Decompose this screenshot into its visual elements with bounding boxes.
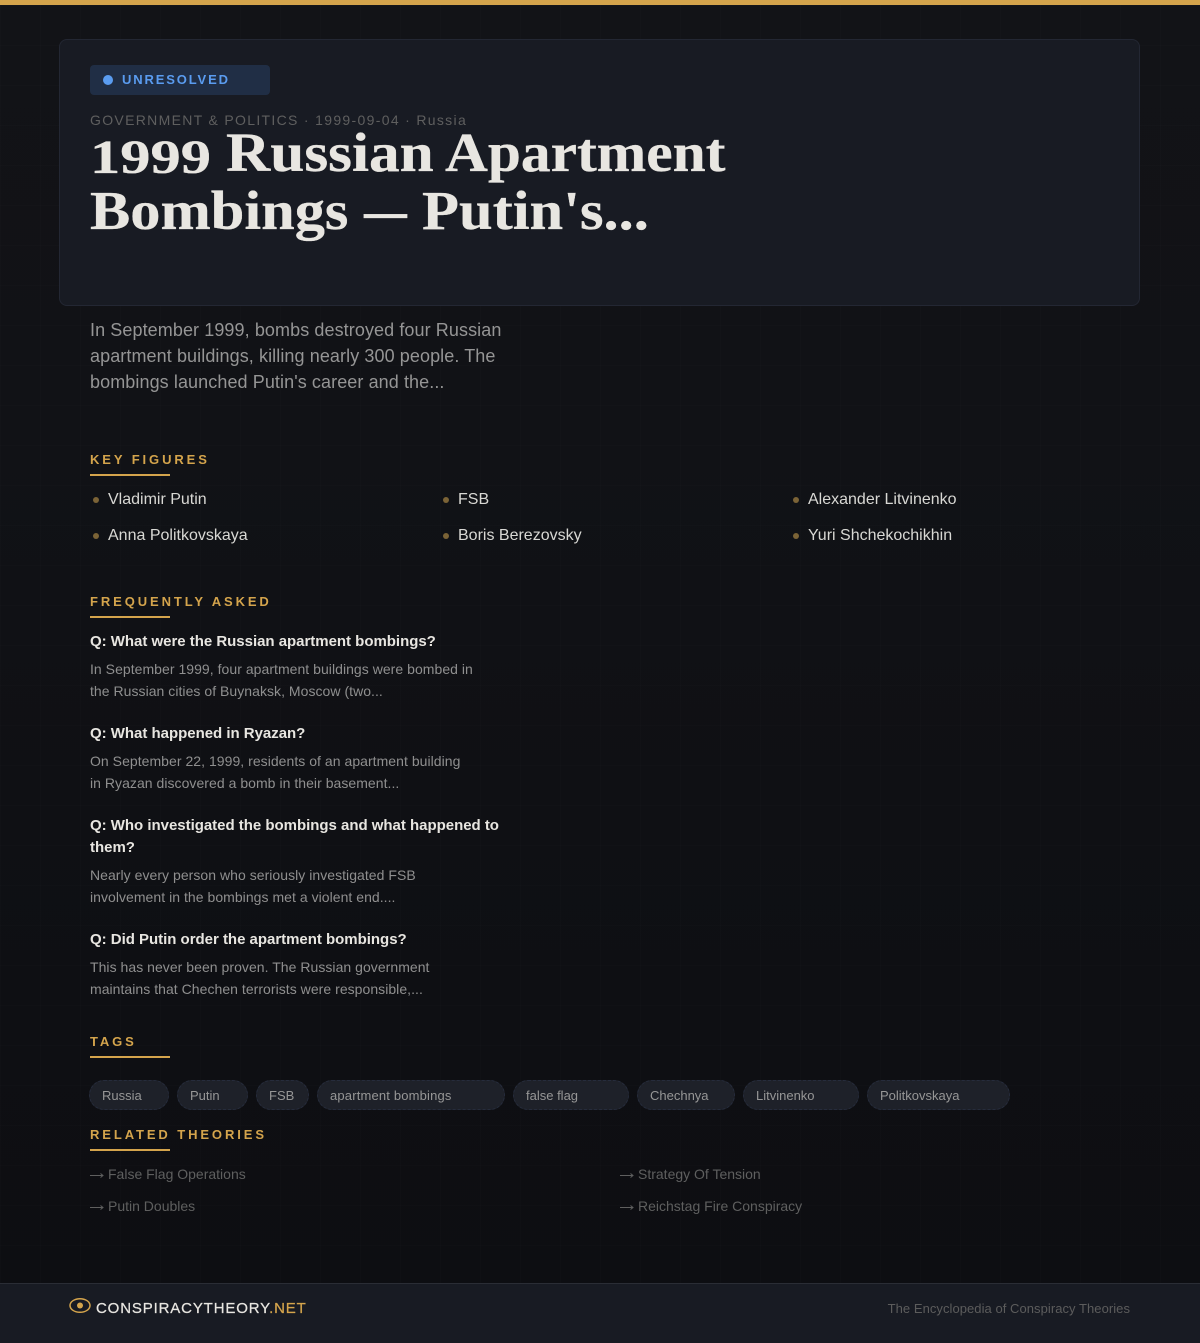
title: Bombings bbox=[90, 180, 348, 241]
faq item 2: Q: What happened in Ryazan? bbox=[90, 725, 305, 742]
related link: Strategy Of Tension: Strategy Of Tension bbox=[638, 1166, 761, 1182]
tag: apartment bombings bbox=[317, 1080, 505, 1110]
faq item 3: Q: Who investigated the bombings and what happened to bbox=[90, 817, 499, 834]
tag: FSB bbox=[256, 1080, 309, 1110]
figure: FSB bbox=[443, 491, 489, 508]
icon: eye logo bbox=[69, 1298, 91, 1313]
faq item 4: maintains that Chechen terrorists were responsible,... bbox=[90, 981, 423, 997]
tag: Putin bbox=[177, 1080, 248, 1110]
title: 1999 bbox=[90, 131, 211, 184]
summary text bbox=[90, 320, 501, 392]
faq item 3: them? bbox=[90, 839, 135, 856]
tag: Politkovskaya: Politkovskaya bbox=[880, 1088, 959, 1103]
tag: false flag: false flag bbox=[526, 1088, 578, 1103]
faq item 4 bbox=[90, 931, 430, 997]
heading: tags: TAGS bbox=[90, 1034, 137, 1049]
summary text: apartment buildings, killing nearly 300 people. The bbox=[90, 346, 496, 366]
title: — bbox=[364, 180, 407, 241]
tag: Chechnya bbox=[637, 1080, 735, 1110]
tag: Russia: Russia bbox=[102, 1088, 142, 1103]
logo wordmark: CONSPIRACYTHEORY.NET bbox=[96, 1300, 307, 1317]
tag: false flag bbox=[513, 1080, 629, 1110]
faq item 2: On September 22, 1999, residents of an apartment building bbox=[90, 753, 460, 769]
faq item 1: Q: What were the Russian apartment bombings? bbox=[90, 633, 436, 650]
tag: FSB: FSB bbox=[269, 1088, 294, 1103]
related link: Putin Doubles: Putin Doubles bbox=[108, 1198, 195, 1214]
tag list bbox=[89, 1080, 1010, 1110]
faq list bbox=[90, 633, 499, 997]
tag: Politkovskaya bbox=[867, 1080, 1010, 1110]
faq item 1: In September 1999, four apartment buildings were bombed in bbox=[90, 661, 473, 677]
footer bbox=[0, 1283, 1200, 1343]
faq item 3: Nearly every person who seriously investigated FSB bbox=[90, 867, 416, 883]
figure: Yuri Shchekochikhin: Yuri Shchekochikhin bbox=[808, 527, 952, 544]
faq item 4: This has never been proven. The Russian government bbox=[90, 959, 430, 975]
tag: Putin: Putin bbox=[190, 1088, 220, 1103]
summary text: bombings launched Putin's career and the... bbox=[90, 372, 445, 392]
title: Russian bbox=[226, 122, 434, 183]
heading: frequently asked: FREQUENTLY ASKED bbox=[90, 594, 272, 609]
tag: Chechnya: Chechnya bbox=[650, 1088, 709, 1103]
status badge: unresolved bbox=[90, 65, 270, 95]
faq item 2: in Ryazan discovered a bomb in their basement... bbox=[90, 775, 399, 791]
related link: False Flag Operations: False Flag Operations bbox=[108, 1166, 246, 1182]
title: Apartment bbox=[445, 122, 725, 183]
key figures list bbox=[93, 491, 957, 544]
footer tagline: The Encyclopedia of Conspiracy Theories bbox=[888, 1301, 1130, 1316]
faq item 1: the Russian cities of Buynaksk, Moscow (two... bbox=[90, 683, 383, 699]
tag: Russia bbox=[89, 1080, 169, 1110]
badge label: UNRESOLVED bbox=[122, 72, 230, 87]
faq item 3 bbox=[90, 817, 499, 905]
title: Putin's... bbox=[422, 180, 649, 241]
icon: status dot bbox=[103, 75, 113, 85]
tag: apartment bombings: apartment bombings bbox=[330, 1088, 452, 1103]
panel: hero header bbox=[59, 39, 1140, 306]
faq item 4: Q: Did Putin order the apartment bombings? bbox=[90, 931, 407, 948]
title bbox=[90, 122, 726, 242]
faq item 1 bbox=[90, 633, 473, 699]
heading: related theories: RELATED THEORIES bbox=[90, 1127, 267, 1142]
figure: Alexander Litvinenko: Alexander Litvinenko bbox=[808, 491, 957, 508]
figure: FSB: FSB bbox=[458, 491, 489, 508]
figure: Vladimir Putin: Vladimir Putin bbox=[108, 491, 207, 508]
related theories list bbox=[90, 1166, 802, 1214]
faq item 2 bbox=[90, 725, 460, 791]
tag: Litvinenko: Litvinenko bbox=[756, 1088, 815, 1103]
summary text: In September 1999, bombs destroyed four Russian bbox=[90, 320, 501, 340]
faq item 3: involvement in the bombings met a violent end.... bbox=[90, 889, 395, 905]
tag: Litvinenko bbox=[743, 1080, 859, 1110]
meta line: GOVERNMENT & POLITICS · 1999-09-04 · Russia bbox=[90, 112, 467, 128]
figure: Anna Politkovskaya: Anna Politkovskaya bbox=[108, 527, 248, 544]
related link: Reichstag Fire Conspiracy: Reichstag Fire Conspiracy bbox=[638, 1198, 802, 1214]
figure: Boris Berezovsky: Boris Berezovsky bbox=[458, 527, 582, 544]
heading: key figures: KEY FIGURES bbox=[90, 452, 210, 467]
